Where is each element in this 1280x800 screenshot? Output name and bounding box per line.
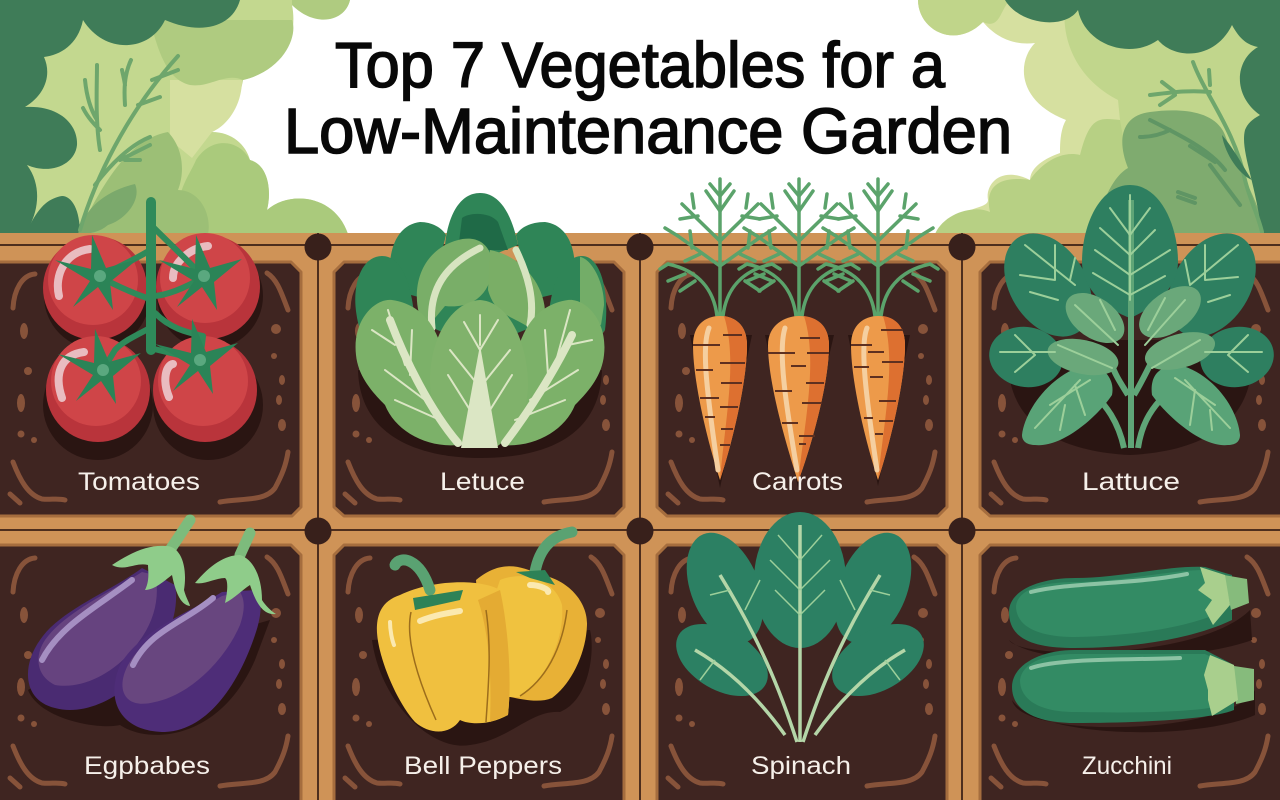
pepper stems: [395, 532, 572, 610]
spinach front leaves: [1022, 365, 1240, 445]
lettuce shadow: [358, 370, 602, 458]
vegetable labels: Carrots: [752, 468, 843, 496]
vegetable labels: Lattuce: [1082, 468, 1180, 496]
vegetable labels: Tomatoes: [78, 468, 200, 496]
pepper bodies: [377, 566, 587, 732]
panel: bell peppers: [372, 532, 592, 746]
zucchini shadows: [1009, 610, 1255, 732]
lettuce middle leaves: [417, 239, 545, 330]
spinach stems: [1095, 200, 1165, 448]
panel: spinach plant: [984, 185, 1279, 455]
panel: zucchini: [1009, 567, 1255, 732]
pepper shadow: [372, 630, 592, 746]
eggplant highlights: [42, 580, 213, 665]
lettuce front leaves: [356, 300, 604, 448]
carrot shadows: [690, 335, 910, 488]
eggplant calyxes: [112, 520, 276, 614]
title: Low-Maintenance Garden: [284, 95, 1012, 167]
vegetable labels: Egpbabes: [84, 752, 210, 780]
spinach veins: [1000, 195, 1262, 430]
tomato calyxes: [55, 235, 242, 404]
vegetable labels: Spinach: [751, 752, 851, 780]
tomato highlights: [58, 246, 208, 398]
title: Top 7 Vegetables for a: [335, 29, 945, 101]
tomato shadows: [43, 243, 263, 460]
spinach shadow: [1008, 340, 1252, 455]
foliage: top left corner: [0, 0, 350, 234]
vegetable labels: [78, 468, 1180, 780]
panel: eggplants: [28, 520, 276, 735]
zucchini bodies: [1009, 567, 1234, 723]
vegetable labels: Letuce: [440, 468, 525, 496]
carrot tops: [660, 179, 938, 316]
carrot lines: [693, 330, 903, 445]
raised bed wooden frame: [0, 233, 1280, 800]
tomato vine: [100, 202, 204, 370]
soil panels: [0, 262, 1280, 800]
carrot roots: [693, 316, 905, 482]
panel: spinach: [664, 512, 936, 742]
lettuce back leaves: [355, 193, 606, 350]
panel: carrots: [660, 179, 938, 488]
vegetable labels: Zucchini: [1082, 752, 1172, 780]
zucchini ends: [1198, 567, 1254, 716]
tomato fruits: [43, 233, 260, 442]
soil details: [10, 273, 1268, 787]
panel: tomatoes: [43, 202, 263, 460]
foliage: top right corner: [918, 0, 1280, 234]
vegetable labels: Bell Peppers: [404, 752, 562, 780]
title: [284, 29, 1012, 167]
eggplant shadow: [28, 620, 270, 735]
spinach back leaves: [984, 185, 1279, 393]
zucchini highlights: [1031, 574, 1187, 668]
panel: lettuce: [355, 193, 606, 458]
eggplant bodies: [28, 568, 261, 732]
